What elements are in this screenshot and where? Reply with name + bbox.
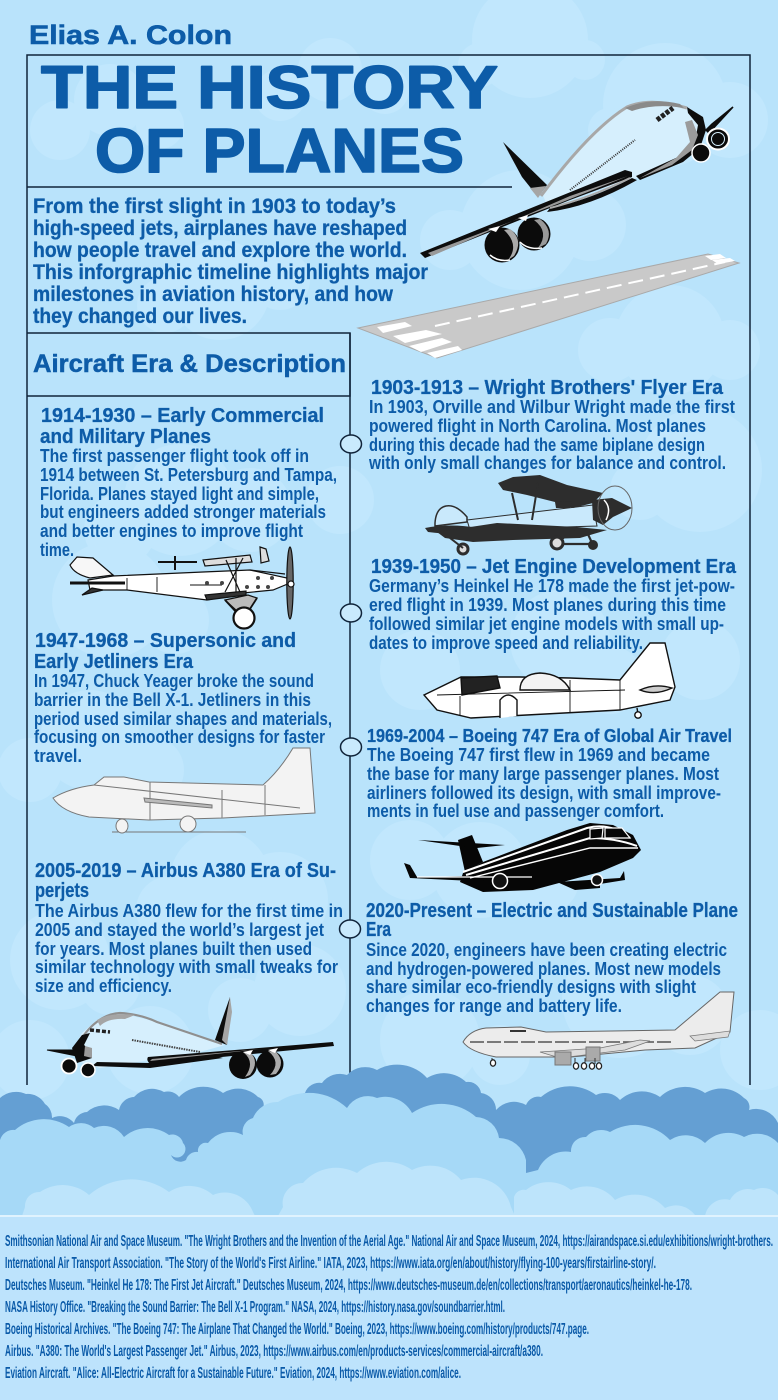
introduction text: From the first slight in 1903 to today’s — [33, 195, 396, 218]
era 1903-1913: with only small changes for balance and control. — [368, 453, 726, 473]
era 2005-2019: The Airbus A380 flew for the first time in — [35, 901, 343, 921]
introduction text: they changed our lives. — [33, 305, 247, 328]
illustration: Boeing 747 — [463, 992, 734, 1069]
author name: Elias A. Colon — [29, 20, 232, 50]
illustration: jet engine plane — [424, 643, 675, 718]
era 1914-1930: time. — [40, 540, 74, 560]
era 1939-1950 — [369, 556, 737, 653]
era 1903-1913: during this decade had the same biplane design — [369, 435, 705, 455]
era 2020-present — [366, 900, 738, 1016]
illustration: runway — [358, 254, 739, 358]
era 2005-2019: size and efficiency. — [35, 976, 172, 996]
era 1914-1930: but engineers added stronger materials — [40, 502, 326, 522]
era 2020-present: changes for range and battery life. — [366, 996, 622, 1016]
era 1914-1930: 1914 between St. Petersburg and Tampa, — [40, 465, 337, 485]
era 1947-1968: 1947-1968 – Supersonic and — [35, 630, 296, 652]
era 1939-1950: followed similar jet engine models with small up- — [369, 614, 724, 634]
introduction text: milestones in aviation history, and how — [33, 283, 394, 306]
references text — [5, 1233, 773, 1382]
era 1914-1930: The first passenger flight took off in — [40, 446, 309, 466]
era 1903-1913 — [368, 377, 735, 473]
era 2005-2019: similar technology with small tweaks for — [35, 957, 338, 977]
era 1969-2004: the base for many large passenger planes. Most — [367, 764, 719, 784]
bottom cloud bank: middle layer — [0, 1093, 778, 1216]
references panel — [0, 1217, 778, 1400]
era 1903-1913: powered flight in North Carolina. Most planes — [369, 416, 706, 436]
era 1947-1968: period used similar shapes and materials, — [34, 709, 332, 729]
era 1914-1930: and Military Planes — [40, 426, 211, 448]
era 1914-1930: 1914-1930 – Early Commercial — [41, 405, 324, 427]
bottom cloud bank: dark layer — [0, 1065, 778, 1180]
era 2005-2019: perjets — [35, 880, 89, 902]
bottom cloud bank: light layer — [22, 1162, 778, 1216]
era 1969-2004: The Boeing 747 first flew in 1969 and became — [367, 745, 710, 765]
divider line above references — [0, 1215, 778, 1217]
illustration: dark biplane — [425, 475, 632, 554]
era 1939-1950: Germany’s Heinkel He 178 made the first jet-pow- — [369, 576, 735, 596]
era 1969-2004: 1969-2004 – Boeing 747 Era of Global Air Travel — [367, 725, 732, 746]
era 2020-present: share similar eco-friendly designs with slight — [366, 977, 696, 997]
era 2005-2019: 2005 and stayed the world’s largest jet — [35, 920, 324, 940]
era 2005-2019: 2005-2019 – Airbus A380 Era of Su- — [35, 860, 336, 882]
era 1947-1968: barrier in the Bell X-1. Jetliners in this — [34, 690, 311, 710]
illustration: hero jet in flight — [420, 101, 733, 263]
title: THE HISTORY — [41, 54, 498, 121]
era 1939-1950: ered flight in 1939. Most planes during this time — [369, 595, 726, 615]
background faint clouds — [0, 0, 778, 1100]
title: OF PLANES — [95, 117, 464, 186]
era 1939-1950: dates to improve speed and reliability. — [369, 633, 643, 653]
title — [41, 54, 498, 186]
era 1914-1930: and better engines to improve flight — [40, 521, 303, 541]
section heading: aircraft era and description: Aircraft Era & Description — [33, 350, 346, 378]
frame and timeline lines — [27, 55, 750, 1085]
era 1914-1930 — [40, 405, 337, 560]
introduction text: This inforgraphic timeline highlights major — [33, 261, 428, 284]
era 2005-2019: for years. Most planes built then used — [35, 939, 312, 959]
illustration: Bell X-1 — [53, 748, 315, 833]
era 1969-2004: airliners followed its design, with small improve- — [367, 783, 721, 803]
introduction text — [33, 195, 428, 328]
era 1969-2004 — [367, 725, 732, 821]
illustration: military biplane — [70, 547, 294, 628]
illustration: Airbus A380 — [47, 997, 334, 1079]
era 1969-2004: ments in fuel use and passenger comfort. — [367, 801, 664, 821]
era 2005-2019 — [35, 860, 343, 996]
era 2020-present: Since 2020, engineers have been creating electric — [366, 940, 727, 960]
era 1939-1950: 1939-1950 – Jet Engine Development Era — [371, 556, 737, 578]
era 1914-1930: Florida. Planes stayed light and simple, — [40, 484, 319, 504]
introduction text: high-speed jets, airplanes have reshaped — [33, 217, 407, 240]
era 1903-1913: In 1903, Orville and Wilbur Wright made the first — [369, 397, 735, 417]
era 1947-1968: Early Jetliners Era — [34, 651, 194, 673]
era 1903-1913: 1903-1913 – Wright Brothers' Flyer Era — [371, 377, 724, 399]
era 1947-1968: travel. — [34, 746, 82, 766]
era 2020-present: and hydrogen-powered planes. Most new models — [366, 959, 721, 979]
era 1947-1968: In 1947, Chuck Yeager broke the sound — [34, 671, 314, 691]
era 2020-present: Era — [366, 919, 392, 941]
era 1947-1968: focusing on smoother designs for faster — [34, 727, 325, 747]
introduction text: how people travel and explore the world. — [33, 239, 407, 262]
era 1947-1968 — [34, 630, 332, 766]
timeline nodes — [340, 435, 362, 938]
illustration: black jetliner — [404, 823, 641, 892]
